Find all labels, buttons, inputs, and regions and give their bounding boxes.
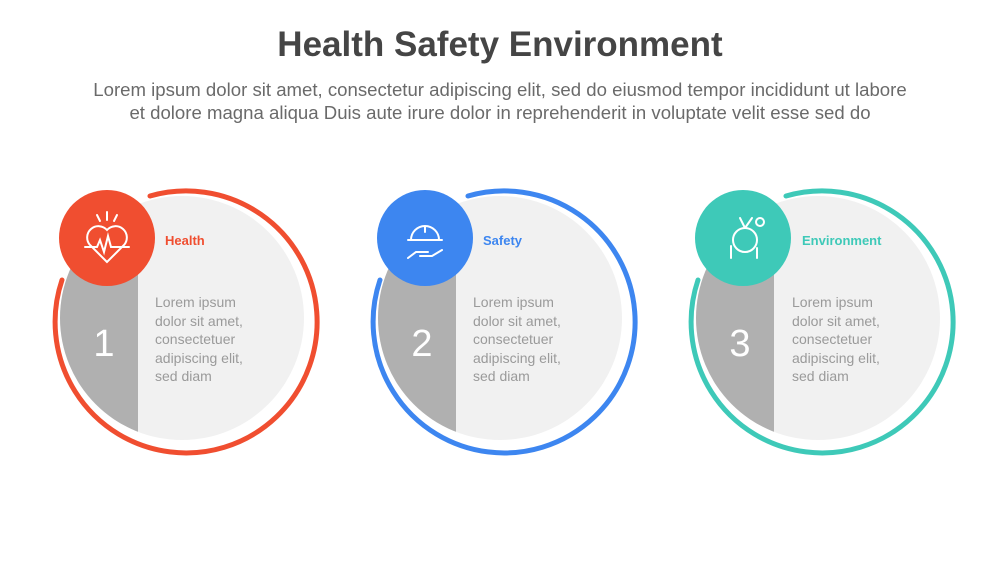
panel: health: 1 [93,323,115,365]
panel: environment: sed diam [792,368,849,384]
panel: safety: Lorem ipsum [473,294,554,310]
panel: health: Health [165,233,205,248]
panel: health: consectetuer [155,331,235,347]
subtitle [93,79,907,123]
panel: safety: adipiscing elit, [473,350,561,366]
panel: environment: adipiscing elit, [792,350,880,366]
subtitle: Lorem ipsum dolor sit amet, consectetur adipiscing elit, sed do eiusmod tempor incididunt ut labore [93,79,907,100]
icon: heart [85,212,129,262]
subtitle: et dolore magna aliqua Duis aute irure dolor in reprehenderit in voluptate velit esse sed do [129,102,871,123]
panel: health: adipiscing elit, [155,350,243,366]
panel: safety: Safety [483,233,523,248]
panel: health: sed diam [155,368,212,384]
icon: helmet hand [408,226,442,258]
panel: environment: Environment [802,233,882,248]
panel: safety: sed diam [473,368,530,384]
diagram [52,188,956,456]
panel: environment: dolor sit amet, [792,313,880,329]
panel: health: Lorem ipsum [155,294,236,310]
panel: environment: consectetuer [792,331,872,347]
panel: environment: Lorem ipsum [792,294,873,310]
panel: safety [368,190,635,453]
title: Health Safety Environment [277,25,723,64]
panel: environment [686,190,953,453]
panel: safety: consectetuer [473,331,553,347]
icon: earth plants [731,218,764,258]
panel: health: dolor sit amet, [155,313,243,329]
panel: safety: 2 [411,323,433,365]
panel: safety: dolor sit amet, [473,313,561,329]
panel: health [50,190,317,453]
panel: environment: 3 [729,323,751,365]
